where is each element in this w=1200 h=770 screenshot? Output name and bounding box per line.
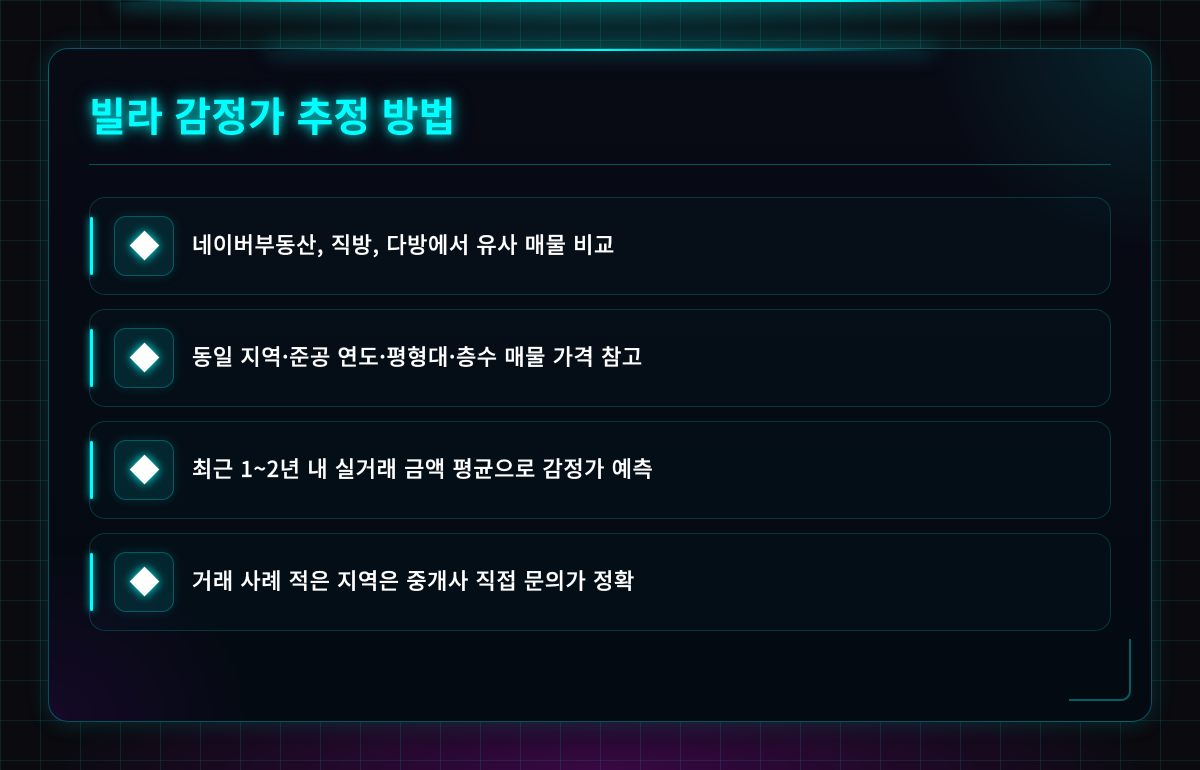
list item 1 bbox=[89, 197, 1111, 295]
panel top neon bar bbox=[269, 49, 933, 51]
icon: diamond bbox=[114, 440, 174, 500]
item text 3: 최근 1~2년 내 실거래 금액 평균으로 감정가 예측 bbox=[192, 452, 653, 484]
item text 2: 동일 지역·준공 연도·평형대·층수 매물 가격 참고 bbox=[192, 340, 643, 372]
top neon bar bbox=[120, 0, 1080, 2]
icon: diamond bbox=[114, 552, 174, 612]
corner bracket bbox=[1069, 639, 1131, 701]
list item 3 bbox=[89, 421, 1111, 519]
item text 4: 거래 사례 적은 지역은 중개사 직접 문의가 정확 bbox=[192, 564, 635, 596]
item text 1: 네이버부동산, 직방, 다방에서 유사 매물 비교 bbox=[192, 228, 615, 260]
icon: diamond bbox=[114, 216, 174, 276]
list item 2 bbox=[89, 309, 1111, 407]
list item 4 bbox=[89, 533, 1111, 631]
icon: diamond bbox=[114, 328, 174, 388]
title: 빌라 감정가 추정 방법 bbox=[89, 85, 456, 143]
